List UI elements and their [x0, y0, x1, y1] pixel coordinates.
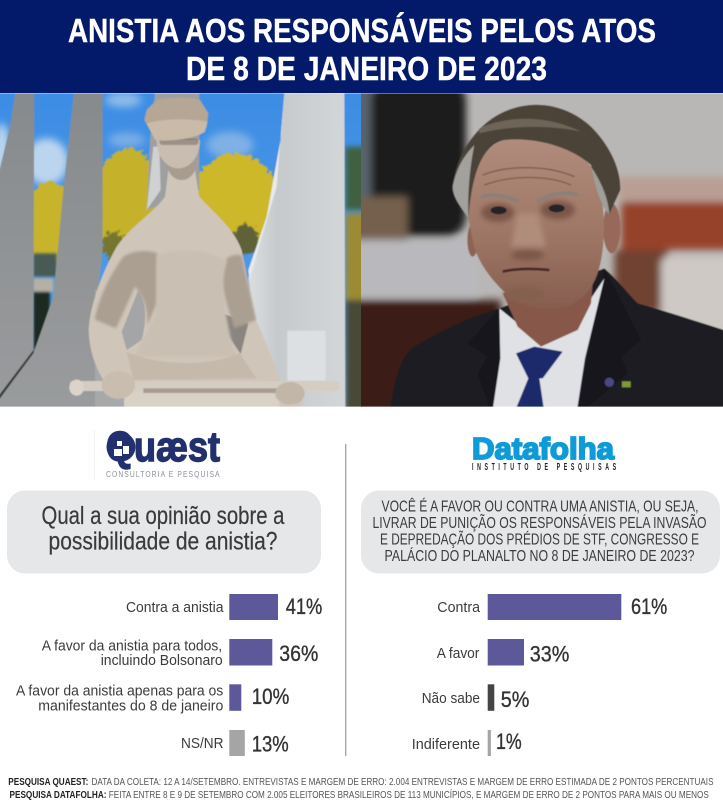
title: DE 8 DE JANEIRO DE 2023 [186, 50, 547, 87]
title [68, 12, 656, 87]
panel: Quaest question [7, 490, 321, 574]
neck [502, 284, 594, 347]
bar chart: Quaest: A favor da anistia apenas para os [16, 682, 223, 700]
ears [603, 203, 620, 253]
bar chart: Quaest: Contra a anistia [126, 599, 224, 616]
logo: Datafolha: Datafolha [472, 431, 615, 466]
shadows on the statue [95, 251, 256, 328]
logo: Quaest: Quæst [106, 423, 220, 470]
pins [605, 378, 614, 387]
bar chart: Datafolha: A favor [437, 645, 479, 662]
forehead wrinkles [483, 168, 574, 185]
header band [0, 0, 723, 93]
bar chart: Quaest: manifestantes do 8 de janeiro [38, 698, 223, 714]
foliage [25, 148, 280, 265]
bar chart: Quaest: incluindo Bolsonaro [101, 652, 223, 669]
bar chart: Quaest: 13% [252, 732, 289, 756]
bar chart: Datafolha: 5% [501, 687, 529, 712]
hair [453, 105, 620, 218]
bar chart: Datafolha [412, 594, 667, 756]
panel: Quaest question: possibilidade de anistia? [48, 528, 278, 556]
logo: Datafolha: INSTITUTO DE PESQUISAS [472, 461, 616, 473]
logo: Quaest [94, 423, 220, 480]
bar chart: Datafolha: 33% [530, 642, 569, 666]
bar chart: Datafolha: Indiferente [412, 736, 480, 753]
bar chart: Quaest: 36% [279, 641, 318, 666]
footnote: survey methodology: PESQUISA QUAEST: [8, 776, 88, 788]
hands [102, 371, 135, 399]
bar chart: Datafolha: Não sabe [422, 690, 480, 707]
mouth [503, 269, 549, 272]
left pillars [0, 83, 34, 413]
suit [389, 268, 723, 417]
tie [516, 346, 563, 407]
photo: Jair Bolsonaro portrait [361, 93, 723, 407]
sword [70, 381, 339, 391]
logo: Quaest: CONSULTORIA E PESQUISA [106, 469, 220, 479]
footnote: survey methodology [8, 776, 714, 800]
photo: statue of Justice in front of the Supreme Court [0, 83, 377, 418]
arm gaps [122, 290, 145, 350]
bar chart: Quaest: 10% [252, 684, 289, 709]
bar chart: Quaest [16, 594, 322, 756]
bar chart: Datafolha: 1% [496, 729, 522, 754]
shirt [492, 278, 604, 417]
neck shadow [165, 160, 195, 180]
statue [69, 97, 339, 417]
bar chart: Datafolha: Contra [437, 599, 481, 616]
face [157, 140, 200, 168]
panel: Quaest question: Qual a sua opinião sobre a [42, 502, 285, 530]
bar chart: Quaest: A favor da anistia para todos, [42, 638, 222, 654]
bar chart: Quaest: 41% [286, 594, 322, 619]
face [468, 138, 604, 308]
divider between polls [345, 444, 346, 756]
eyes [491, 206, 507, 214]
right pillar [248, 83, 345, 417]
bar chart: Quaest: NS/NR [181, 735, 224, 752]
bar chart: Datafolha: 61% [631, 594, 667, 619]
eyebrows [481, 195, 519, 202]
back pillar [147, 83, 199, 210]
eye sockets [481, 201, 575, 300]
hat and blindfold [144, 97, 208, 134]
panel: Datafolha question [361, 490, 720, 574]
